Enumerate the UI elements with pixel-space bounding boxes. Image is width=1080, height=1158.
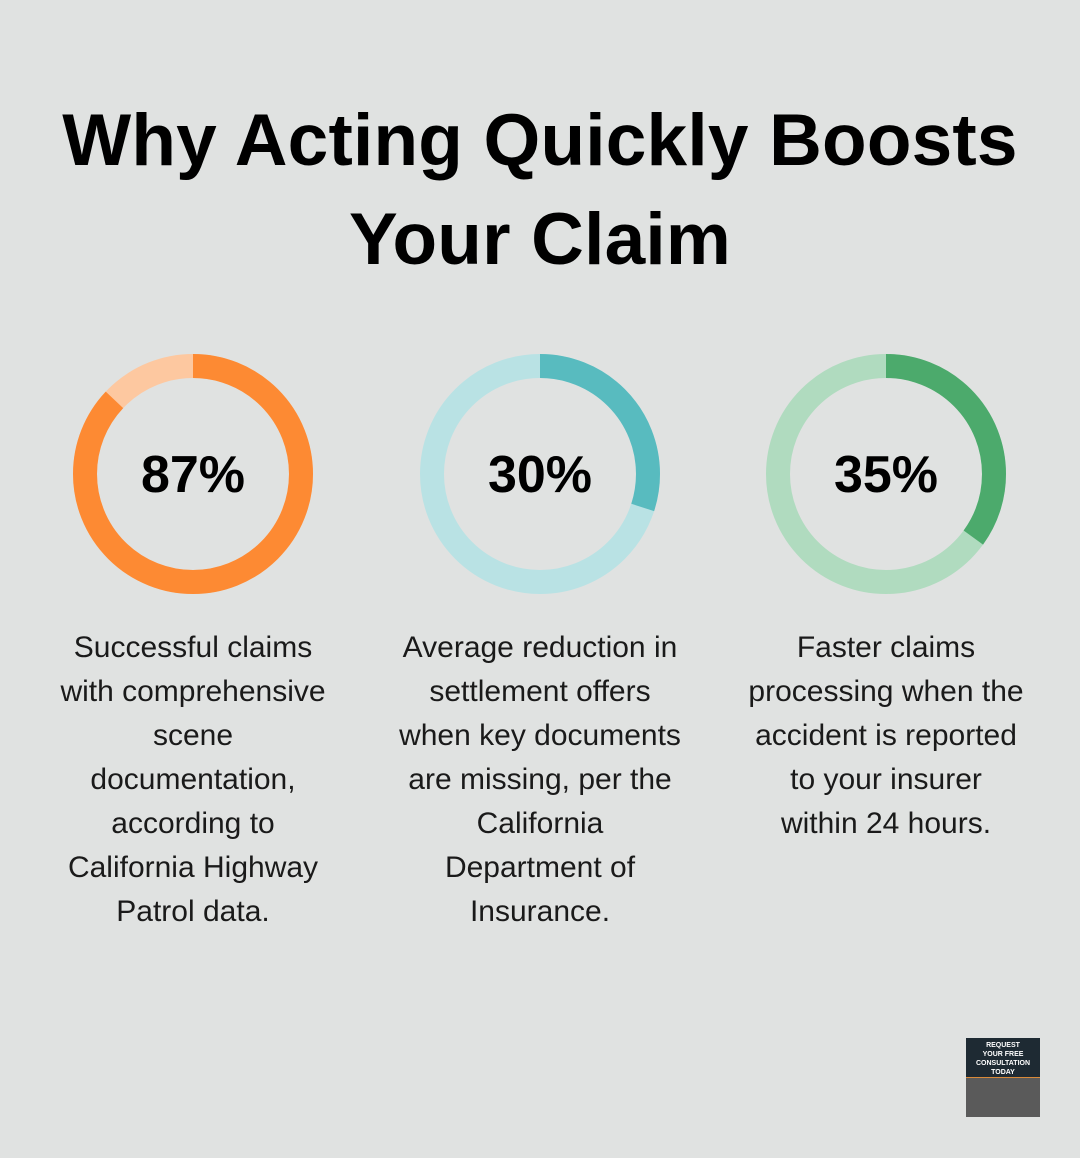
text: 87% description: according to: [111, 807, 275, 840]
badge: consultation: TODAY: [991, 1069, 1015, 1076]
text: 30% description: when key documents: [399, 719, 681, 752]
text: 87% description: Patrol data.: [116, 895, 270, 928]
title: Why Acting Quickly Boosts: [62, 100, 1018, 181]
text: 35% description: processing when the: [748, 675, 1024, 708]
text: 87% description: with comprehensive: [60, 675, 326, 708]
title: [62, 100, 1018, 280]
donut: 87%: [73, 354, 313, 594]
badge: consultation: CONSULTATION: [976, 1060, 1030, 1067]
text: 35% description: within 24 hours.: [781, 807, 991, 840]
text: 87% description: California Highway: [68, 851, 318, 884]
badge: consultation: REQUEST: [986, 1042, 1020, 1049]
text: 30% description: [399, 631, 681, 928]
text: 87% description: [60, 631, 326, 928]
text: 30% description: Average reduction in: [403, 631, 677, 664]
badge: consultation: YOUR FREE: [983, 1051, 1023, 1058]
donut: 87%: 87%: [141, 446, 245, 504]
text: 30% description: settlement offers: [429, 675, 651, 708]
text: 87% description: scene: [153, 719, 233, 752]
donut: 35%: 35%: [834, 446, 938, 504]
title: Your Claim: [349, 199, 731, 280]
text: 30% description: Department of: [445, 851, 635, 884]
text: 35% description: [748, 631, 1024, 840]
donut: 35%: [766, 354, 1006, 594]
donut: 30%: 30%: [488, 446, 592, 504]
donut: 30%: [420, 354, 660, 594]
badge: consultation: [966, 1038, 1040, 1117]
text: 35% description: accident is reported: [755, 719, 1017, 752]
text: 30% description: California: [477, 807, 603, 840]
text: 30% description: Insurance.: [470, 895, 610, 928]
text: 35% description: Faster claims: [797, 631, 975, 664]
text: 35% description: to your insurer: [790, 763, 982, 796]
text: 30% description: are missing, per the: [408, 763, 672, 796]
text: 87% description: documentation,: [90, 763, 296, 796]
text: 87% description: Successful claims: [74, 631, 312, 664]
